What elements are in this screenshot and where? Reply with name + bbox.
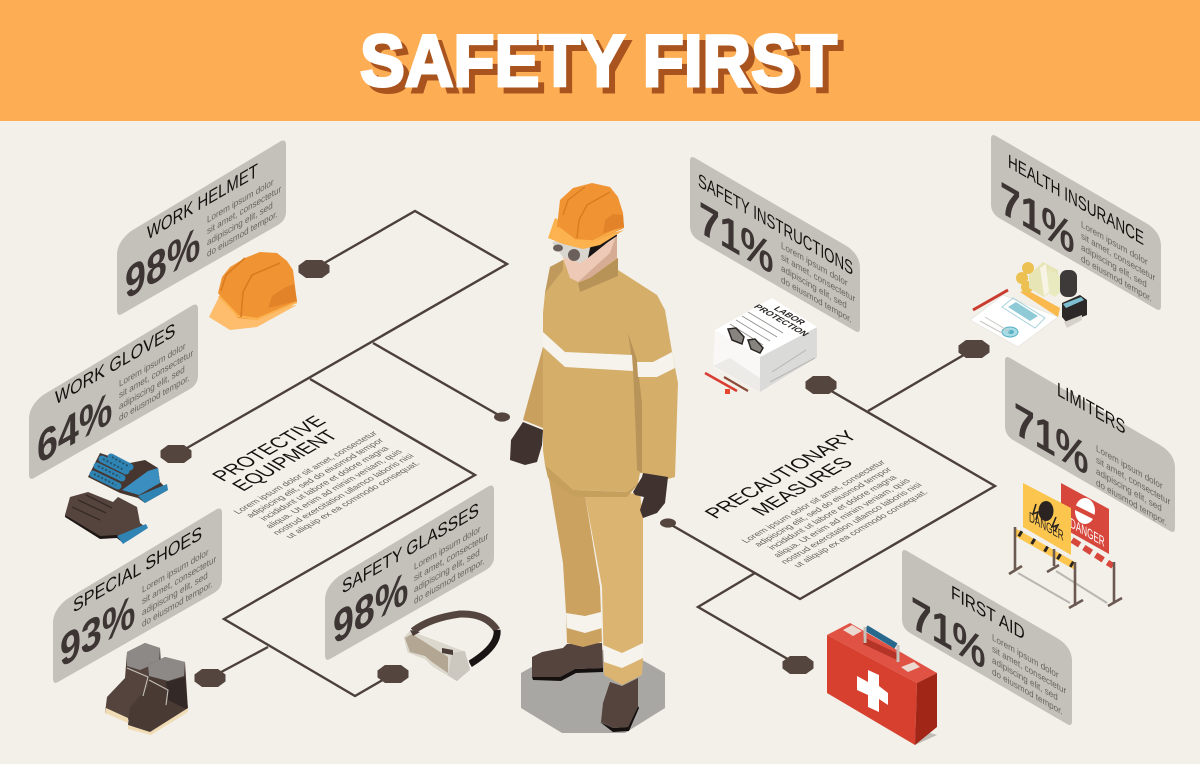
panel: safety glasses: adipiscing elit, sed [414, 547, 480, 595]
panel: work gloves: sit amet, consectetur [119, 348, 193, 400]
icon: insurance documents [970, 262, 1087, 347]
panel: first aid: FIRST AID [951, 582, 1025, 646]
labor protection label: LABOR [771, 305, 808, 326]
panel: work helmet [117, 140, 286, 315]
panel: safety instructions: Lorem ipsum dolor [781, 240, 848, 288]
text block: protective equipment: ut aliquip ex ea commodo consequat. [283, 460, 422, 540]
panel: health insurance: 71% [1000, 171, 1074, 265]
panel: work gloves: 64% [37, 380, 112, 475]
panel: safety instructions: adipiscing elit, sed [781, 263, 847, 311]
text block: precautionary measures: PRECAUTIONARY [700, 428, 863, 522]
panel: limiters: sit amet, consectetur [1096, 454, 1170, 507]
panel: limiters: Lorem ipsum dolor [1096, 443, 1163, 491]
text block: precautionary measures: MEASURES [747, 454, 858, 519]
panel: work helmet: Lorem ipsum dolor [207, 177, 274, 225]
panel: work gloves: Lorem ipsum dolor [119, 341, 186, 389]
icon: brown glove [65, 492, 148, 544]
text block: protective equipment: nostrud exercitation ullamco laboris nisi [270, 452, 416, 536]
panel: first aid: adipiscing elit, sed [992, 655, 1058, 703]
floor platform [521, 650, 665, 733]
text block: precautionary measures: ut aliquip ex ea commodo consequat. [791, 489, 930, 569]
panel: safety glasses [325, 486, 494, 660]
labor protection label: PROTECTION [752, 303, 811, 337]
panel: limiters: do eiusmod tempor. [1096, 477, 1167, 528]
red danger sign: DANGER [1070, 514, 1105, 550]
panel: safety glasses: Lorem ipsum dolor [414, 524, 481, 572]
panel: work gloves [29, 304, 198, 479]
panel: special shoes: do eiusmod tempor. [142, 578, 213, 629]
panel: special shoes: SPECIAL SHOES [73, 522, 202, 618]
panel: work helmet: sit amet, consectetur [207, 184, 281, 236]
gloves [510, 422, 543, 465]
icon: blue glove [88, 453, 168, 503]
head [552, 232, 618, 292]
text block: protective equipment: aliqua. Ut enim ad minim veniam, quis [263, 448, 405, 530]
panel: safety glasses: 98% [333, 560, 408, 655]
panel: limiters: adipiscing elit, sed [1096, 466, 1162, 514]
text block: precautionary measures: incididunt ut labore et dolore magna [765, 473, 900, 551]
worker helmet [548, 183, 624, 249]
title: SAFETY FIRST [360, 21, 837, 102]
text block: precautionary measures [700, 428, 935, 572]
panel: safety glasses: sit amet, consectetur [414, 531, 488, 583]
panel: safety instructions [690, 157, 860, 332]
panel: work helmet: adipiscing elit, sed [207, 200, 273, 248]
panel: health insurance: HEALTH INSURANCE [1008, 151, 1144, 251]
panel: safety instructions: 71% [699, 191, 773, 285]
panel: first aid: Lorem ipsum dolor [992, 632, 1059, 680]
jacket [523, 258, 678, 497]
text block: precautionary measures: aliqua. Ut enim ad minim veniam, quis [771, 477, 913, 559]
panel: first aid [902, 550, 1072, 725]
text block: protective equipment: incididunt ut labore et dolore magna [257, 444, 392, 522]
worker figure [510, 183, 678, 733]
panel: limiters: 71% [1014, 392, 1088, 486]
connector nodes [160, 260, 990, 687]
text block: precautionary measures: adipiscing elit, sed do eiusmod tempor [752, 466, 894, 548]
panel: limiters: LIMITERS [1057, 379, 1125, 440]
icon: safety goggles [403, 614, 497, 682]
text block: precautionary measures: nostrud exercitation ullamco laboris nisi [778, 481, 924, 565]
text block: precautionary measures: Lorem ipsum dolor sit amet, consectetur [739, 459, 888, 544]
text block: protective equipment: adipiscing elit, sed do eiusmod tempor [244, 437, 386, 519]
panel: safety instructions: do eiusmod tempor. [781, 274, 852, 325]
icon: work helmet [209, 252, 297, 330]
panel: special shoes: sit amet, consectetur [142, 554, 216, 606]
panel: safety glasses: SAFETY GLASSES [342, 499, 479, 599]
yellow danger sign: DANGER [1029, 508, 1064, 544]
panel: health insurance: do eiusmod tempor. [1081, 253, 1152, 304]
panel: health insurance: adipiscing elit, sed [1081, 242, 1147, 290]
connector lines: protective equipment [180, 211, 507, 696]
text block: protective equipment: PROTECTIVE [207, 413, 331, 485]
title banner: SAFETY FIRST [366, 27, 843, 108]
text block: protective equipment [207, 413, 427, 543]
panel: work helmet: WORK HELMET [147, 160, 258, 245]
panel: health insurance [991, 135, 1161, 310]
panel: work helmet: do eiusmod tempor. [207, 208, 278, 259]
panel: health insurance: Lorem ipsum dolor [1081, 219, 1148, 267]
panel: work helmet: 98% [125, 215, 200, 310]
panel: limiters [1005, 357, 1175, 532]
glove fingers [93, 457, 130, 486]
panel: health insurance: sit amet, consectetur [1081, 230, 1155, 283]
connector lines: precautionary measures [668, 349, 995, 665]
panel: first aid: do eiusmod tempor. [992, 666, 1063, 717]
right shoe [600, 678, 639, 732]
icon: labor protection documents [705, 298, 819, 394]
panel: safety instructions: sit amet, consectetur [781, 251, 855, 304]
panel: work gloves: WORK GLOVES [55, 319, 175, 410]
panel: special shoes: 93% [60, 583, 135, 678]
title banner [0, 0, 1200, 121]
trousers [547, 467, 643, 685]
panel: work gloves: adipiscing elit, sed [119, 364, 185, 412]
icon: first aid kit [827, 623, 937, 745]
panel: first aid: sit amet, consectetur [992, 643, 1066, 696]
panel: special shoes [53, 508, 222, 683]
icon: boots [105, 643, 188, 735]
panel: special shoes: Lorem ipsum dolor [142, 547, 209, 595]
panel: safety instructions: SAFETY INSTRUCTIONS [698, 170, 853, 281]
panel: special shoes: adipiscing elit, sed [142, 570, 208, 618]
left shoe [532, 643, 603, 681]
panel: first aid: 71% [911, 586, 985, 680]
text block: protective equipment: Lorem ipsum dolor sit amet, consectetur [231, 430, 380, 515]
panel: work gloves: do eiusmod tempor. [119, 372, 190, 423]
text block: protective equipment: EQUIPMENT [227, 427, 344, 494]
panel: safety glasses: do eiusmod tempor. [414, 555, 485, 606]
icon: danger barriers [1009, 483, 1122, 608]
